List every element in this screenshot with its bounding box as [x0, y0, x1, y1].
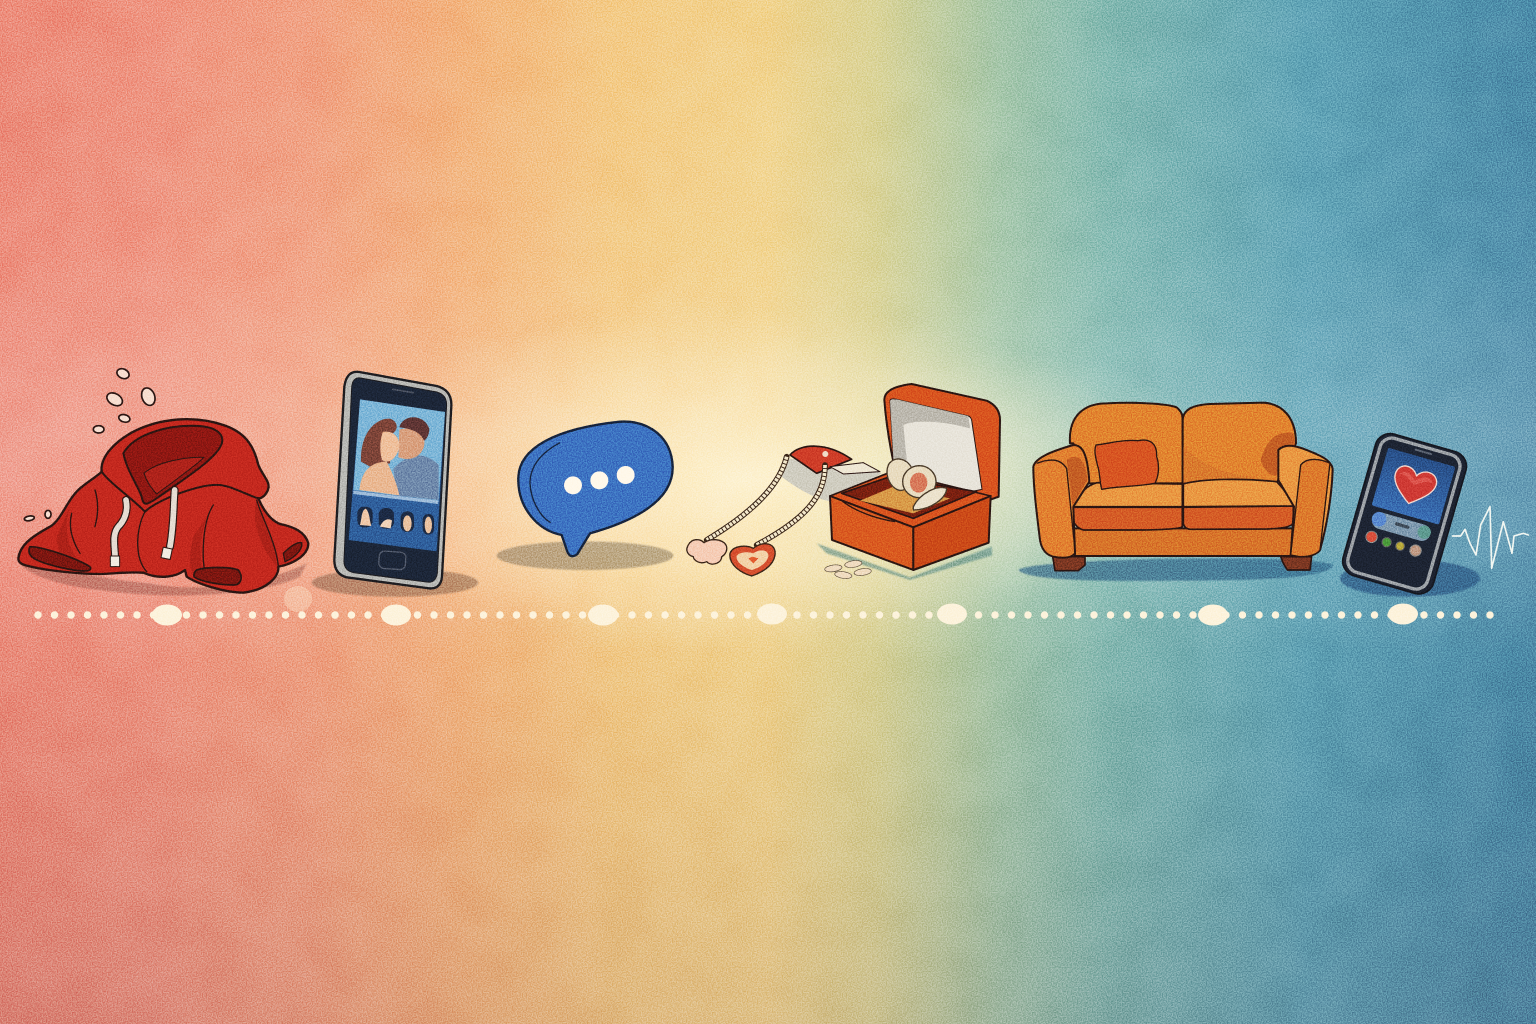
phone display: [349, 399, 445, 551]
typing dots: [564, 476, 582, 494]
phone body group: [1339, 430, 1470, 598]
right arm: [1278, 446, 1333, 557]
cushion top left: [1073, 483, 1182, 507]
hoodie body: [18, 419, 308, 593]
phone silver bezel: [1345, 435, 1463, 592]
necklace chains: [707, 457, 825, 545]
contact thumbnails: [357, 507, 434, 535]
photo sky: [353, 399, 445, 501]
drawstring right tip: [161, 547, 172, 560]
milestone dot 1: [152, 604, 182, 626]
heart: [1388, 464, 1439, 509]
phone shadow: [312, 569, 478, 597]
faded blob: [284, 586, 312, 612]
sofa back right: [1183, 403, 1296, 483]
hood edge: [102, 472, 258, 512]
lid interior: [890, 399, 982, 497]
milestone dot 7: [1388, 604, 1418, 624]
icon: tilted phone with heart: [1339, 430, 1528, 598]
woman hair: [361, 419, 397, 467]
box top rim: [830, 472, 991, 527]
flower pendant: [687, 540, 727, 564]
left arm: [1033, 445, 1089, 558]
phone body: [334, 372, 451, 588]
icon: orange sofa: [1018, 403, 1333, 581]
call pill: [1370, 510, 1432, 543]
sofa shadow: [1018, 558, 1333, 581]
bubble shadow: [497, 541, 673, 570]
hood opening: [123, 426, 222, 504]
box inner rim line: [842, 501, 895, 522]
milestone dot 6: [1198, 604, 1228, 626]
woman shoulders: [359, 462, 399, 495]
sofa base: [1073, 528, 1293, 556]
right sleeve cuff: [194, 567, 241, 585]
hood inner fold: [144, 457, 204, 494]
bubble highlight line: [530, 443, 560, 523]
sofa back left: [1070, 403, 1183, 483]
milestone dot 3: [588, 604, 618, 626]
white tab: [830, 463, 880, 474]
box interior: [842, 477, 977, 518]
box shadow: [817, 543, 992, 580]
milestone dot 2: [381, 604, 411, 626]
contact bar: [353, 491, 439, 504]
cushion top right: [1183, 479, 1294, 507]
colored buttons: [1365, 530, 1379, 544]
cushion lower right: [1183, 506, 1293, 529]
icon: jewelry box and necklace: [687, 384, 1000, 580]
icon: phone with couple photo: [312, 372, 478, 597]
phone case: [1339, 430, 1470, 598]
man shirt: [393, 456, 439, 500]
man face: [398, 428, 424, 459]
bubble body: [518, 422, 673, 556]
throw pillow: [1095, 440, 1158, 489]
drawstring right: [170, 490, 175, 547]
phone glass: [344, 378, 447, 582]
icon: red hoodie: [18, 367, 308, 595]
small tablets: [824, 559, 872, 580]
speaker slit: [1414, 448, 1432, 455]
drawstring left: [114, 500, 127, 557]
zipper and pocket folds: [70, 490, 278, 580]
icon: speech bubble: [497, 422, 673, 570]
sweat drops: [24, 367, 157, 521]
woman face: [380, 432, 399, 462]
speaker: [393, 389, 413, 393]
drawstring left tip: [110, 556, 120, 567]
home button: [378, 551, 406, 570]
rings: [887, 459, 913, 490]
left sleeve cuff: [29, 547, 91, 571]
box lid: [884, 384, 1000, 503]
vibration pulse: [1453, 507, 1528, 568]
man hair: [399, 417, 429, 441]
phone shadow: [1340, 560, 1480, 597]
milestone dot 5: [937, 604, 967, 624]
dotted timeline: [38, 586, 1500, 626]
hoodie shading: [57, 500, 277, 580]
box front left: [830, 496, 913, 570]
red clasp: [790, 446, 852, 473]
back sleeve cuff: [283, 543, 302, 562]
small tray under lid: [782, 458, 882, 502]
heart display: [1372, 448, 1455, 525]
box front right: [913, 496, 991, 570]
cushion lower left: [1073, 507, 1182, 530]
sofa legs: [1053, 557, 1085, 571]
sofa back shade: [1261, 433, 1295, 475]
milestone dot 4: [757, 604, 787, 624]
hoodie shadow: [20, 563, 307, 595]
heart pendant: [730, 544, 775, 576]
